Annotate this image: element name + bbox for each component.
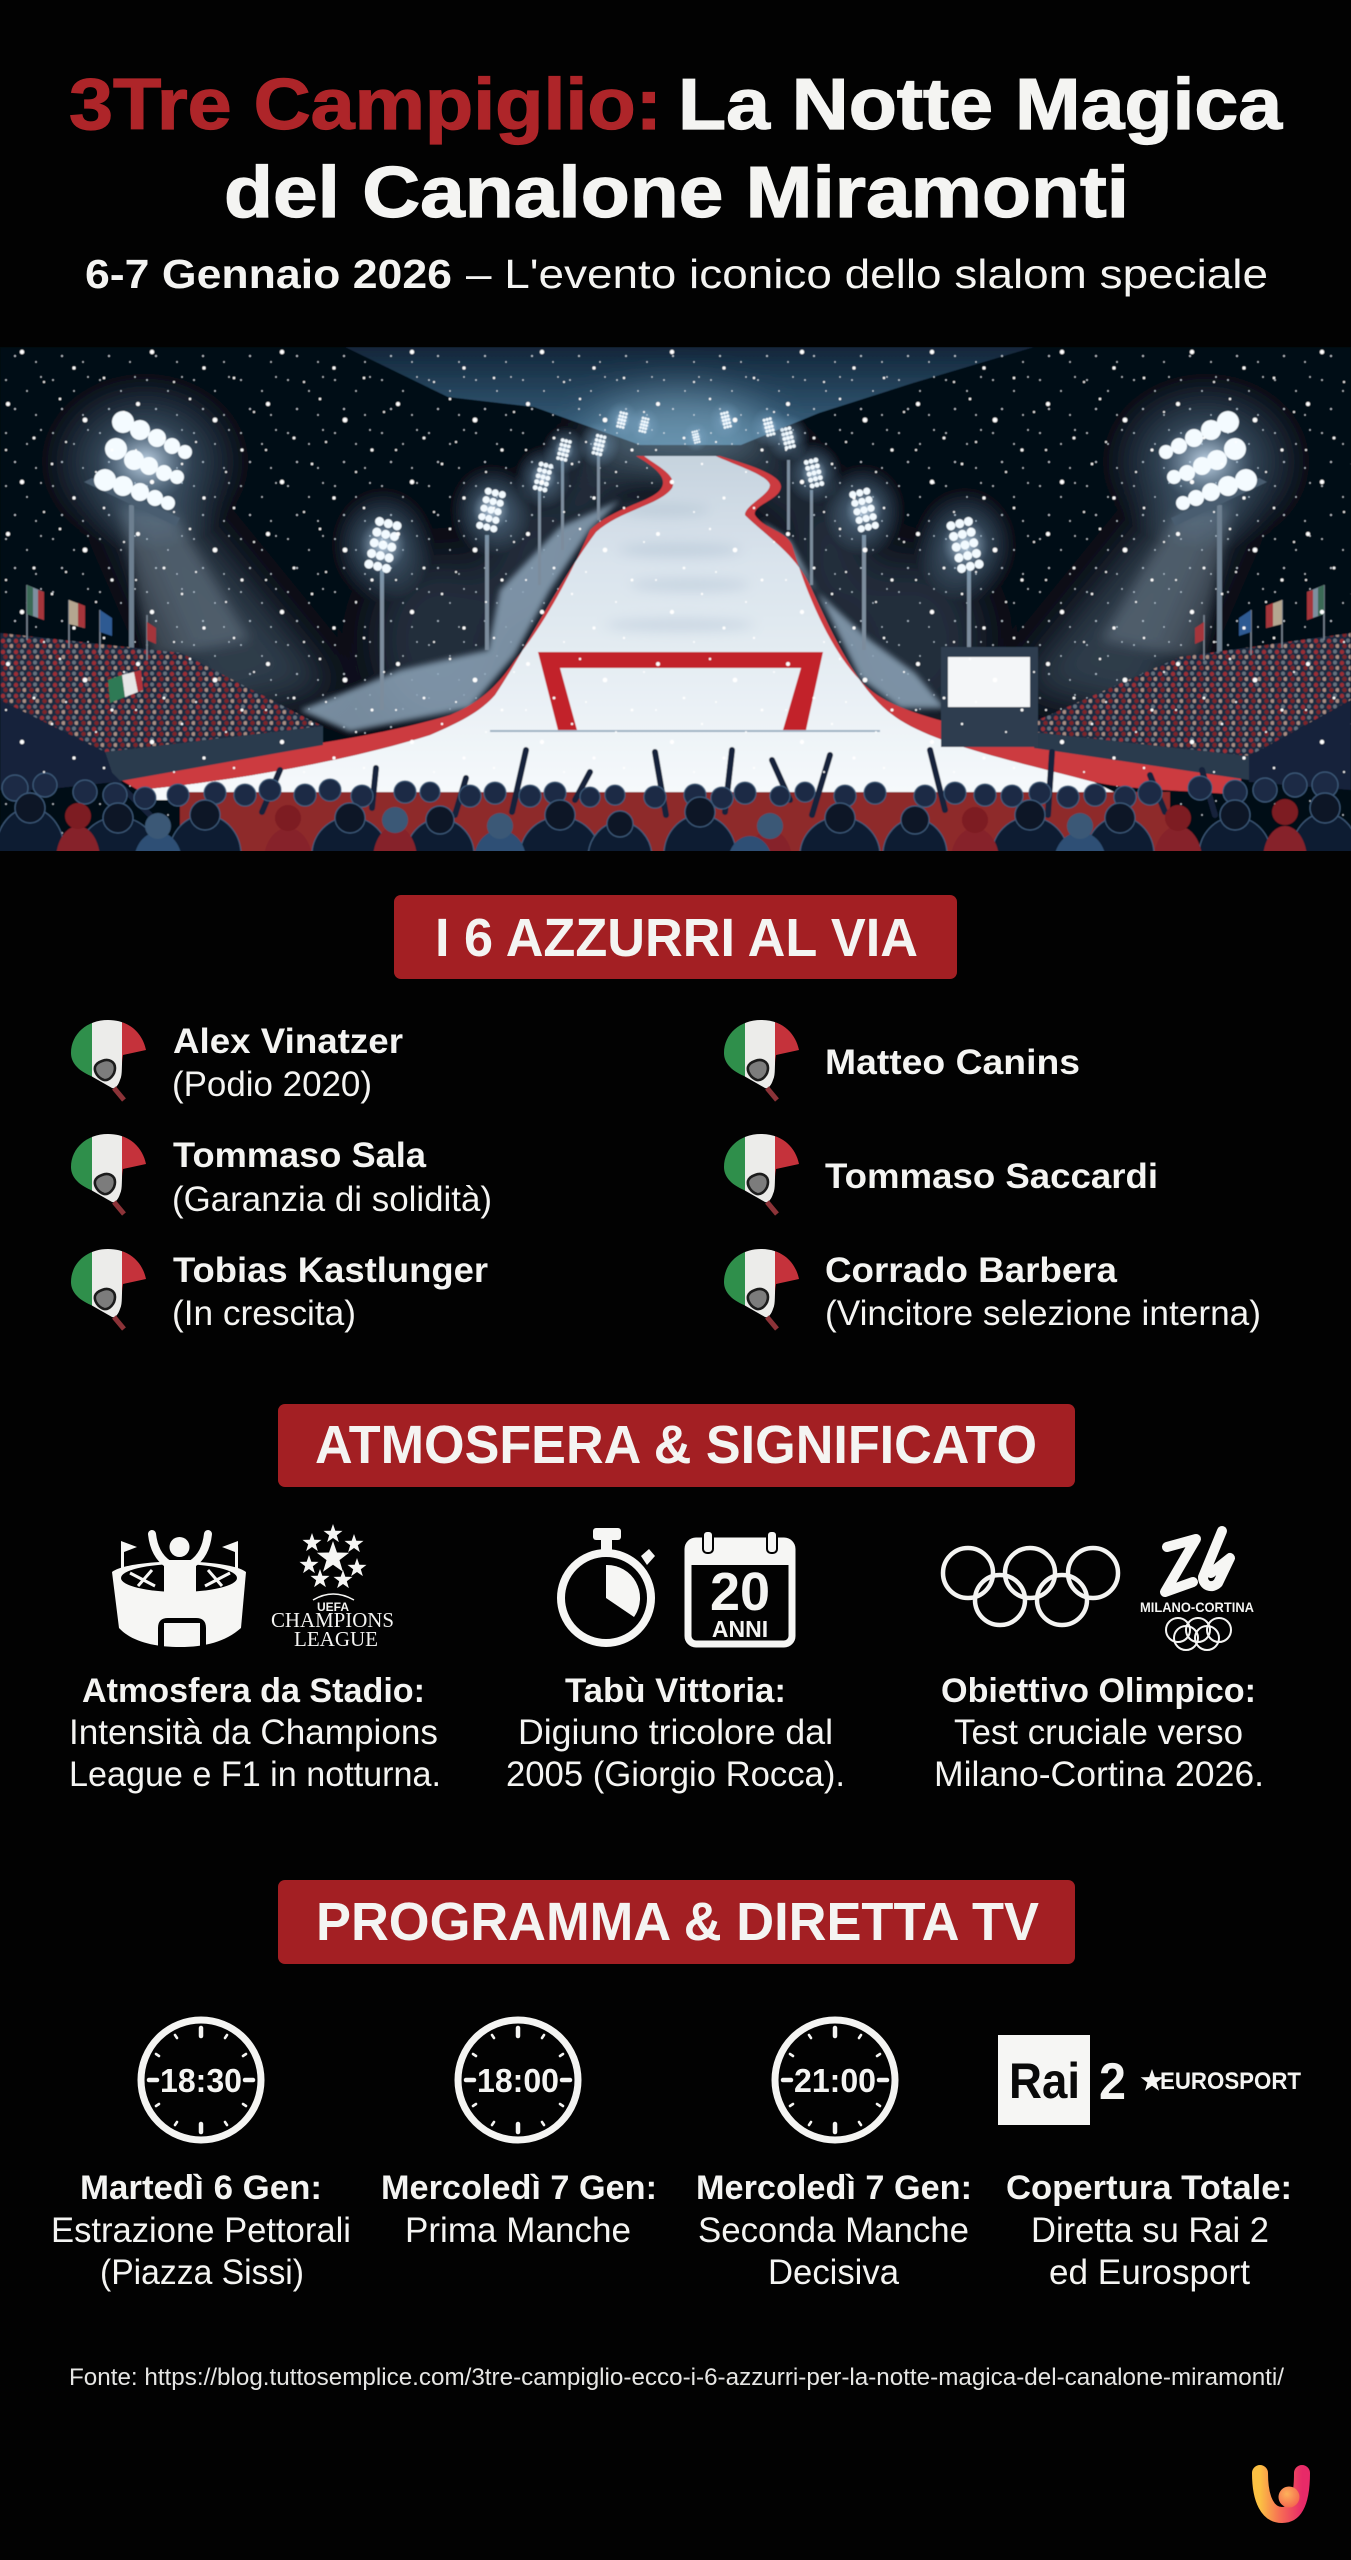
text block: atmosfera da stadio: [69, 1672, 441, 1794]
raised arms: [20, 750, 1335, 815]
icon: Rai 2 logo: 2: [1099, 2053, 1126, 2111]
athlete: Tommaso Saccardi: [724, 1134, 1158, 1214]
red barrier behind spectators: [180, 792, 1170, 852]
crowd: [0, 770, 1351, 851]
text block: copertura totale: ed Eurosport: [1049, 2253, 1250, 2292]
text block: obiettivo olimpico: [934, 1672, 1264, 1794]
text block: mercoledì 7 gen prima manche: [381, 2169, 657, 2250]
icon: Italian helmet: [71, 1249, 148, 1329]
red finish gate: [538, 652, 823, 730]
right grandstand: [1034, 633, 1351, 756]
flags above the stands: [27, 585, 156, 660]
text block: tabù vittoria: [506, 1672, 845, 1794]
icon: Italian helmet: [724, 1134, 801, 1214]
athlete: Tommaso Sala: Tommaso Sala: [173, 1136, 427, 1175]
section header: I 6 azzurri al via: I 6 AZZURRI AL VIA: [435, 908, 918, 968]
snow banks beside the piste: [300, 500, 620, 732]
athlete: Corrado Barbera: [724, 1249, 1261, 1333]
icon: Milano-Cortina 2026 logo: [1140, 1531, 1254, 1650]
right red course edge: [716, 456, 1241, 795]
illustration: night slalom slope with floodlights and crowd: [0, 347, 1351, 897]
athlete: Tobias Kastlunger: (In crescita): [172, 1294, 356, 1333]
icon: Italian helmet: [724, 1020, 801, 1100]
Italian flag in the stands: [108, 675, 125, 703]
left red course edge: [112, 456, 673, 790]
icon: stopwatch: [561, 1528, 655, 1643]
icon: clock 18:00: [458, 2020, 578, 2140]
section header: programma e diretta tv: PROGRAMMA & DIRETTA TV: [316, 1892, 1039, 1952]
icon: Champions League logo: UEFA: [317, 1600, 349, 1614]
text block: mercoledì 7 gen prima manche: Mercoledì 7 Gen:: [381, 2169, 657, 2207]
athlete: Corrado Barbera: (Vincitore selezione interna): [825, 1294, 1261, 1333]
athlete: Tommaso Sala: (Garanzia di solidità): [172, 1180, 492, 1219]
title: del Canalone Miramonti: [224, 153, 1129, 233]
text block: copertura totale: Copertura Totale:: [1006, 2169, 1292, 2207]
text block: obiettivo olimpico: Obiettivo Olimpico:: [941, 1672, 1256, 1710]
icon: clock 18:30: 18:30: [160, 2062, 242, 2099]
icon: calendar 20 anni: 20: [710, 1562, 770, 1622]
athlete: Tobias Kastlunger: [71, 1249, 488, 1333]
text block: tabù vittoria: Tabù Vittoria:: [565, 1672, 786, 1710]
floodlights: left bank: [40, 372, 660, 720]
floodlights: right bank: [683, 372, 1311, 720]
source line: Fonte: https://blog.tuttosemplice.com/3tre-campiglio-ecco-i-6-azzurri-per-la-notte-magica-del-canalone-miramonti/: [69, 2364, 1284, 2391]
icon: Eurosport logo: EUROSPORT: [1160, 2068, 1301, 2095]
athlete: Alex Vinatzer: (Podio 2020): [172, 1065, 372, 1104]
icon: Champions League logo: LEAGUE: [294, 1627, 378, 1651]
icon: clock 18:30: [141, 2020, 261, 2140]
athlete: Corrado Barbera: Corrado Barbera: [825, 1251, 1118, 1290]
icon: Italian helmet: [71, 1134, 148, 1214]
icon: Italian helmet: [724, 1249, 801, 1329]
text block: atmosfera da stadio: Atmosfera da Stadio:: [82, 1672, 425, 1710]
text block: tabù vittoria: 2005 (Giorgio Rocca).: [506, 1755, 845, 1794]
athlete: Tobias Kastlunger: Tobias Kastlunger: [173, 1251, 488, 1290]
icon: clock 21:00: [775, 2020, 895, 2140]
subtitle: [85, 251, 1268, 297]
text block: martedì 6 gen: [51, 2169, 351, 2292]
icon: stadium with cheering fan: [112, 1534, 246, 1647]
icon: Italian helmet: [71, 1020, 148, 1100]
text block: martedì 6 gen: Estrazione Pettorali: [51, 2211, 351, 2250]
icon: Olympic rings: [943, 1548, 1118, 1625]
text block: mercoledì 7 gen prima manche: Prima Manche: [405, 2211, 631, 2250]
athlete: Tommaso Saccardi: Tommaso Saccardi: [825, 1157, 1158, 1196]
text block: atmosfera da stadio: League e F1 in notturna.: [69, 1755, 441, 1794]
text block: martedì 6 gen: (Piazza Sissi): [100, 2253, 304, 2292]
section header: atmosfera e significato: ATMOSFERA & SIGNIFICATO: [315, 1415, 1037, 1475]
text block: obiettivo olimpico: Test cruciale verso: [954, 1713, 1243, 1752]
title: 3Tre Campiglio:: [69, 65, 662, 145]
icon: calendar 20 anni: ANNI: [712, 1616, 768, 1642]
text block: obiettivo olimpico: Milano-Cortina 2026.: [934, 1755, 1264, 1794]
icon: Champions League logo: CHAMPIONS: [271, 1608, 394, 1632]
icon: Rai 2 logo: Rai: [1009, 2053, 1080, 2109]
text block: copertura totale: [1006, 2169, 1292, 2292]
ski piste: [138, 456, 1130, 800]
title: [69, 65, 1283, 233]
icon: brand logo: [1260, 2473, 1302, 2515]
text block: mercoledì 7 gen seconda manche: Decisiva: [768, 2253, 900, 2292]
section header: atmosfera e significato: [278, 1404, 1075, 1487]
text block: mercoledì 7 gen seconda manche: Mercoledì 7 Gen:: [696, 2169, 972, 2207]
panel: athletes: [71, 1020, 1261, 1333]
left grandstand: [0, 633, 323, 752]
section header: I 6 azzurri al via: [394, 895, 957, 979]
title: La Notte Magica: [678, 65, 1283, 145]
section header: programma e diretta tv: [278, 1880, 1075, 1964]
text block: martedì 6 gen: Martedì 6 Gen:: [80, 2169, 322, 2207]
athlete: Matteo Canins: [724, 1020, 1080, 1100]
icon: calendar 20 anni: [688, 1531, 792, 1644]
icon: Champions League logo: [271, 1524, 394, 1651]
lit forest beside the piste: [370, 440, 985, 725]
icon: Rai 2 logo: [998, 2035, 1126, 2125]
athlete: Matteo Canins: Matteo Canins: [825, 1043, 1080, 1082]
subtitle: 6-7 Gennaio 2026: [85, 251, 452, 297]
big screen: [941, 647, 1038, 747]
icon: clock 21:00: 21:00: [794, 2062, 876, 2099]
athlete: Alex Vinatzer: Alex Vinatzer: [173, 1022, 403, 1061]
icon: Milano-Cortina 2026 logo: MILANO-CORTINA: [1140, 1599, 1254, 1615]
falling snow: [0, 347, 1351, 787]
night sky over the forest: [345, 347, 1034, 445]
athlete: Alex Vinatzer: [71, 1020, 403, 1104]
text block: copertura totale: Diretta su Rai 2: [1031, 2211, 1269, 2250]
text block: mercoledì 7 gen seconda manche: Seconda Manche: [698, 2211, 969, 2250]
text block: tabù vittoria: Digiuno tricolore dal: [518, 1713, 833, 1752]
subtitle: – L'evento iconico dello slalom speciale: [466, 251, 1268, 297]
text block: atmosfera da stadio: Intensità da Champions: [69, 1713, 438, 1752]
icon: clock 18:00: 18:00: [477, 2062, 559, 2099]
athlete: Tommaso Sala: [71, 1134, 492, 1219]
text block: mercoledì 7 gen seconda manche: [696, 2169, 972, 2292]
